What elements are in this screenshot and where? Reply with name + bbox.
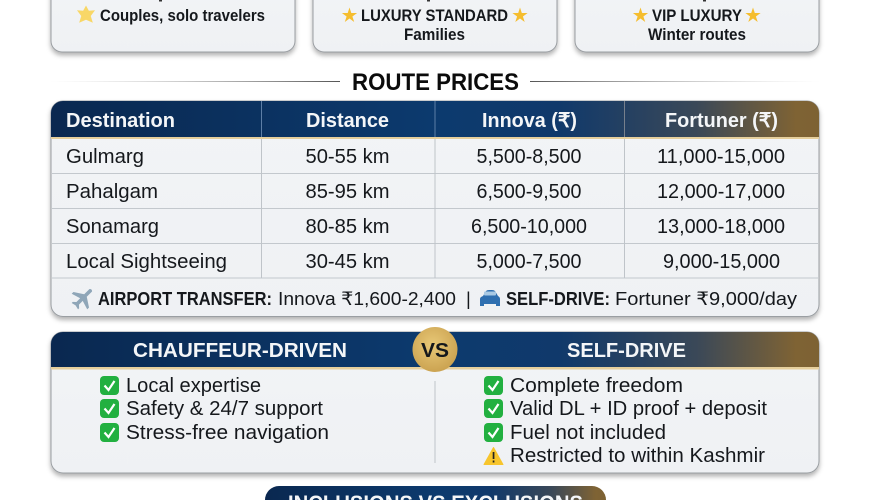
comparison header: SELF-DRIVE [567,340,686,362]
panel: couples card [51,0,295,52]
panel: luxury standard card [313,0,557,52]
item: fuel: Fuel not included [510,422,666,444]
footer: transfer and self-drive prices: | [466,288,471,309]
badge: VS: VS [421,340,449,362]
panel: route price table [51,101,819,316]
row: Local Sightseeing [66,251,780,273]
row: Gulmarg: Gulmarg [66,146,144,168]
row: Pahalgam: Pahalgam [66,181,158,203]
table header: Innova (₹) [482,110,577,132]
footer: transfer and self-drive prices: AIRPORT TRANSFER: [98,288,272,309]
heading: inclusions vs exclusions [265,486,606,500]
row: Sonamarg [66,216,785,238]
icon: star left [342,8,357,22]
row: Pahalgam: 6,500-9,500 [476,181,582,203]
table header: Fortuner (₹) [665,110,778,132]
footer: transfer and self-drive prices: Innova ₹1,600-2,400 [278,288,456,309]
comparison header [51,332,819,370]
panel: vip luxury card [575,0,819,52]
item: freedom: Complete freedom [510,375,683,397]
text: couples: Couples, solo travelers [100,6,265,25]
row: Sonamarg: 6,500-10,000 [471,216,587,238]
table header: Destination [66,110,175,132]
row: Local Sightseeing: Local Sightseeing [66,251,227,273]
icon: star right [745,8,761,22]
list: chauffeur benefits [100,375,329,444]
row: Sonamarg: Sonamarg [66,216,159,238]
item: safety: Safety & 24/7 support [126,398,323,420]
row: Gulmarg: 11,000-15,000 [657,146,785,168]
badge: VS [412,327,458,372]
text: luxury standard: LUXURY STANDARD [361,6,508,25]
row: Pahalgam: 85-95 km [306,181,390,203]
icon: star left [633,8,648,22]
text: vip luxury: VIP LUXURY [652,6,743,25]
footer: transfer and self-drive prices: Fortuner ₹9,000/day [615,288,798,309]
row: Sonamarg: 80-85 km [306,216,390,238]
icon: glowing star [77,6,95,23]
footer: transfer and self-drive prices: SELF-DRIVE: [506,288,610,309]
icon: airplane [67,282,99,314]
panel: chauffeur vs self-drive [51,327,819,473]
row: Local Sightseeing: 9,000-15,000 [663,251,780,273]
row: Sonamarg: 13,000-18,000 [657,216,785,238]
row: Pahalgam [66,181,785,203]
comparison header: CHAUFFEUR-DRIVEN [133,340,347,362]
item: documents: Valid DL + ID proof + deposit [510,398,767,420]
row: Gulmarg: 5,500-8,500 [476,146,582,168]
list: self-drive terms [484,375,767,467]
text: winter routes: Winter routes [648,26,746,44]
heading: route prices: ROUTE PRICES [352,69,519,96]
table header [51,101,819,139]
footer: transfer and self-drive prices [67,282,798,314]
icon: car [480,290,500,306]
item: local expertise: Local expertise [126,375,261,397]
row: Local Sightseeing: 30-45 km [306,251,390,273]
icon: star right [512,8,528,22]
row: Gulmarg: 50-55 km [306,146,390,168]
row: Pahalgam: 12,000-17,000 [657,181,785,203]
row: Gulmarg [66,146,785,168]
table header: Distance [306,110,389,132]
row: Local Sightseeing: 5,000-7,500 [476,251,582,273]
text: families: Families [404,26,465,44]
item: restriction: Restricted to within Kashmir [510,445,765,467]
item: stress-free: Stress-free navigation [126,422,329,444]
